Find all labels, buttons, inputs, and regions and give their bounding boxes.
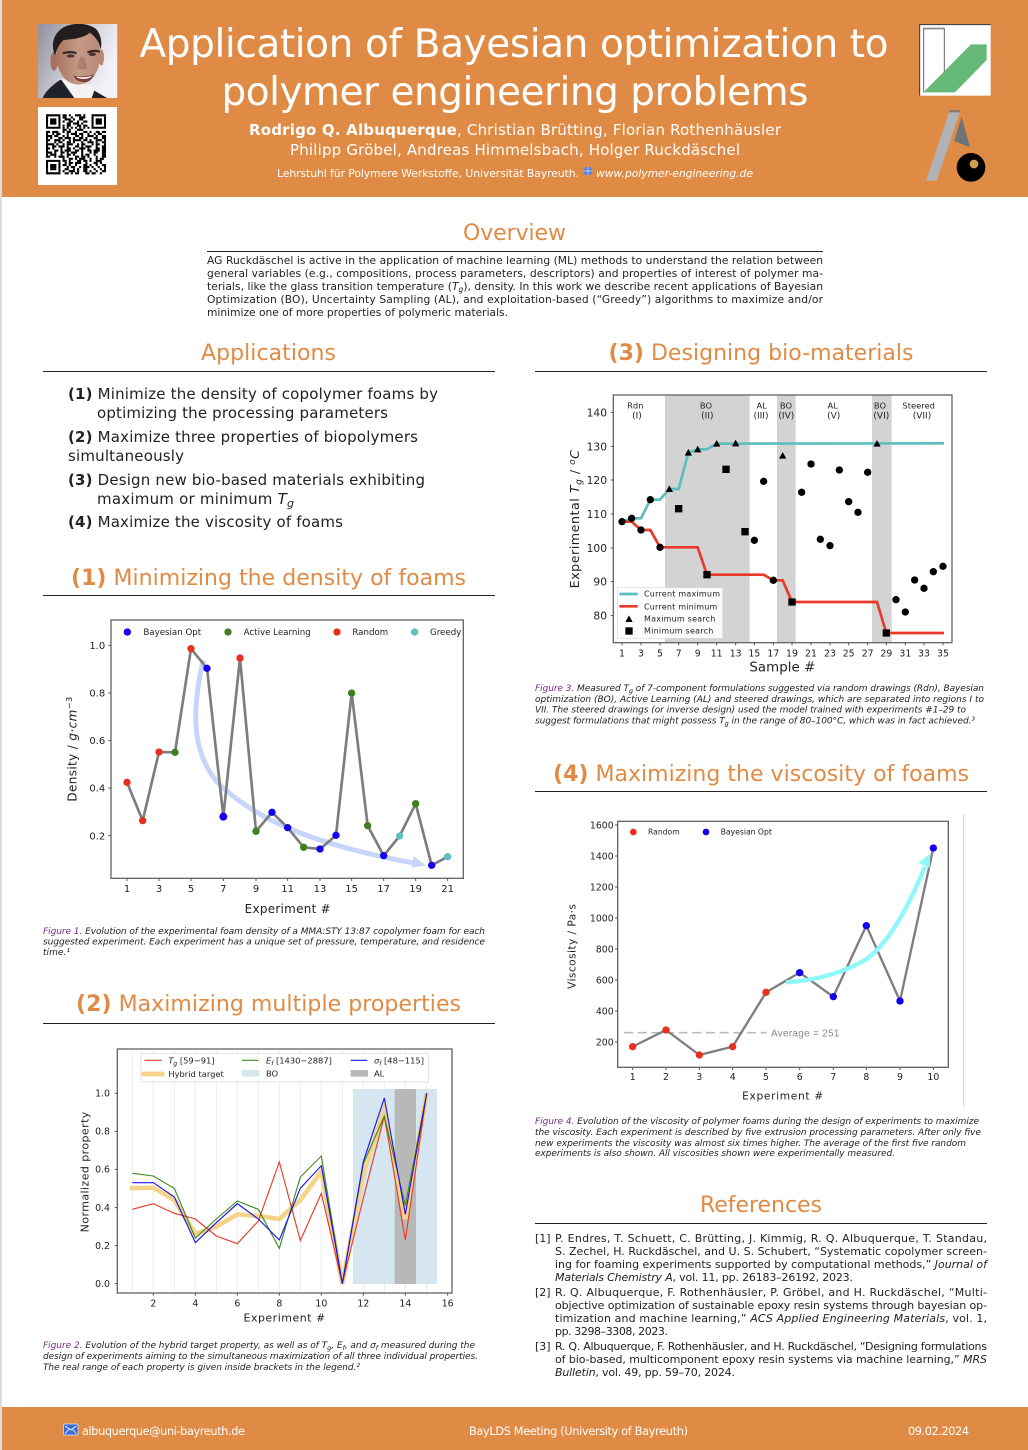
chart: density per experiment <box>64 620 463 916</box>
axes labels: 140 <box>587 406 607 419</box>
axes labels: 3 <box>638 649 644 660</box>
icon: email <box>64 1424 78 1435</box>
axes labels: 100 <box>587 542 607 555</box>
figure 4 caption: Figure 4. Evolution of the viscosity of polymer foams during the design of experiments to maximize <box>535 1117 979 1127</box>
current minimum line <box>622 522 944 633</box>
data points <box>629 844 937 1059</box>
axes labels: 1.0 <box>89 641 105 652</box>
applications list: optimizing the processing parameters <box>97 404 388 422</box>
axes labels: 1200 <box>590 882 614 893</box>
region labels: AL <box>756 401 767 411</box>
axes labels: 9 <box>253 884 259 895</box>
affiliation <box>277 166 753 180</box>
legend: Maximum search <box>644 614 715 623</box>
region labels <box>627 401 935 422</box>
shaded regions <box>665 395 892 643</box>
axes labels: 3 <box>156 884 162 895</box>
axes labels: 0.2 <box>95 1241 110 1252</box>
contact email: albuquerque@uni-bayreuth.de <box>82 1425 245 1438</box>
title: Application of Bayesian optimization to <box>140 22 888 67</box>
axes labels: 16 <box>442 1299 454 1310</box>
axes labels: 25 <box>843 649 855 660</box>
section 1 heading: (1) Minimizing the density of foams <box>71 566 466 591</box>
figure 2 caption: g <box>327 1344 331 1352</box>
legend: Current minimum <box>644 602 718 611</box>
axes labels: 29 <box>880 649 892 660</box>
axes labels: 2 <box>150 1299 156 1310</box>
axes labels: 31 <box>899 649 911 660</box>
axes labels: 0.8 <box>89 689 105 700</box>
axes labels: 800 <box>596 944 614 955</box>
region labels: (V) <box>827 412 840 422</box>
references section <box>535 1193 989 1379</box>
axes labels: 7 <box>220 884 227 895</box>
axes labels: 8 <box>276 1299 282 1310</box>
data line <box>633 848 933 1055</box>
axes labels: Experiment # <box>243 1312 325 1325</box>
axes labels: 1 <box>619 649 625 660</box>
authors: Rodrigo Q. Albuquerque, Christian Brütting, Florian Rothenhäusler <box>249 121 782 139</box>
section 2 heading: (2) Maximizing multiple properties <box>76 992 461 1017</box>
region labels: BO <box>780 401 793 411</box>
axes labels: C <box>567 450 582 459</box>
axes labels <box>567 406 949 676</box>
axes labels: 15 <box>748 649 760 660</box>
reference 3: Bulletin, vol. 49, pp. 59–70, 2024. <box>555 1366 735 1379</box>
axes labels: 5 <box>188 884 194 895</box>
axes labels: 7 <box>676 649 682 660</box>
affiliation: www.polymer-engineering.de <box>596 167 753 180</box>
axes labels: 1 <box>124 884 130 895</box>
current maximum line <box>622 443 944 522</box>
axes labels: 1.0 <box>95 1089 110 1100</box>
region labels: BO <box>874 401 887 411</box>
figure 2 caption: Figure 2. Evolution of the hybrid target property, as well as of T <box>43 1341 327 1351</box>
applications list: (3) Design new bio-based materials exhibiting <box>68 471 425 489</box>
chart: normalized properties <box>79 1049 454 1325</box>
reference 2: [2] <box>535 1286 551 1299</box>
axes labels: g <box>575 479 585 485</box>
axes labels: Density / g·cm <box>66 710 80 802</box>
axes labels: 7 <box>830 1072 836 1083</box>
QR code <box>38 107 117 185</box>
axes labels: 9 <box>695 649 701 660</box>
figure 3 caption: in the range of 80–100°C, which was in fact achieved.³ <box>729 716 975 726</box>
authors <box>249 121 782 159</box>
axes labels: 27 <box>862 649 874 660</box>
axes labels: 1400 <box>590 851 614 862</box>
reference 1 <box>535 1232 989 1284</box>
series: Ef <box>132 1093 427 1284</box>
legend: [48−115] <box>381 1056 424 1066</box>
applications list: (4) Maximize the viscosity of foams <box>68 513 343 531</box>
legend <box>141 1053 428 1082</box>
overview text: minimize one of more properties of polymeric materials. <box>207 306 508 319</box>
event: BayLDS Meeting (University of Bayreuth) <box>469 1425 688 1438</box>
reference 1: [1] <box>535 1232 551 1245</box>
axes labels: 6 <box>797 1072 803 1083</box>
reference 2: R. Q. Albuquerque, F. Rothenhäusler, P. Gröbel, and H. Ruckdäschel, “Multi- <box>555 1286 987 1299</box>
axes labels: 19 <box>786 649 798 660</box>
reference 1: ing for foaming experiments supported by computational methods,” Journal of <box>555 1258 989 1271</box>
applications list: (2) Maximize three properties of biopolymers <box>68 428 418 446</box>
figure 2 caption: , and σ <box>345 1341 376 1351</box>
header banner <box>2 0 1028 197</box>
axes labels: 23 <box>824 649 836 660</box>
figure 3 caption: suggest formulations that might possess T <box>535 716 725 726</box>
figure 3 caption: Figure 3. Measured T <box>535 684 629 694</box>
legend: Random <box>648 828 680 837</box>
region labels: Steered <box>902 401 935 411</box>
figure 3 caption: g <box>629 687 633 695</box>
overview text: general variables (e.g., compositions, process parameters, descriptors) and properties of interest of polymer ma- <box>207 267 823 280</box>
portrait photo <box>38 24 117 98</box>
legend: Current maximum <box>644 590 720 599</box>
applications list: maximum or minimum T <box>97 490 287 508</box>
axes labels: 33 <box>918 649 930 660</box>
axes labels: 11 <box>281 884 294 895</box>
legend <box>124 628 461 638</box>
reference 2: objective optimization of sustainable epoxy resin systems through bayesian op- <box>555 1299 987 1312</box>
applications list: (1) Minimize the density of copolymer foams by <box>68 385 438 403</box>
logo: university emblem <box>926 110 985 182</box>
axes labels: 13 <box>730 649 742 660</box>
legend: E <box>266 1056 272 1066</box>
axes labels: 19 <box>409 884 422 895</box>
legend: Hybrid target <box>168 1069 225 1079</box>
figure 2 caption: f <box>376 1344 380 1352</box>
axes labels: 12 <box>357 1299 369 1310</box>
axes labels: 10 <box>315 1299 327 1310</box>
axes labels: 0.6 <box>95 1165 110 1176</box>
axes labels: 120 <box>587 474 607 487</box>
data points <box>123 645 451 869</box>
axes labels: 17 <box>377 884 390 895</box>
axes labels: 90 <box>593 576 607 589</box>
figure 2 caption: f <box>343 1344 347 1352</box>
overview text: AG Ruckdäschel is active in the application of machine learning (ML) methods to understand the relation between <box>207 254 823 267</box>
reference 3 <box>535 1340 987 1379</box>
figure 3 caption: VII. The steered drawings (or inverse design) used the model trained with experiments #1–29 to <box>535 706 966 716</box>
axes labels: 10 <box>927 1072 939 1083</box>
region labels: (III) <box>754 412 768 422</box>
figure 4 caption <box>535 1117 981 1159</box>
legend: Bayesian Opt <box>143 628 202 638</box>
reference 2: pp. 3298–3308, 2023. <box>555 1325 668 1338</box>
legend: [59−91] <box>177 1056 215 1066</box>
axes labels: 3 <box>696 1072 702 1083</box>
axes labels: 130 <box>587 440 607 453</box>
average line: Average = 251 <box>771 1029 840 1040</box>
arrow: rising viscosity trend <box>786 853 930 982</box>
figure 3 caption: g <box>725 720 729 728</box>
applications list: g <box>287 497 294 510</box>
legend <box>617 588 723 638</box>
figure 4 caption: the viscosity. Each experiment is described by five extrusion processing parameters. After only five <box>535 1128 981 1138</box>
series: hybrid target <box>130 1093 427 1284</box>
applications section <box>43 341 495 531</box>
footer bar <box>2 1407 1028 1450</box>
axes labels: 200 <box>596 1037 614 1048</box>
region labels: Rdn <box>627 401 644 411</box>
axes labels: 5 <box>657 649 663 660</box>
axes labels: 0.4 <box>89 784 105 795</box>
figure 2 caption: , E <box>331 1341 343 1351</box>
axes labels: 35 <box>937 649 949 660</box>
reference 3: R. Q. Albuquerque, F. Rothenhäusler, and H. Ruckdäschel, “Designing formulations <box>555 1340 987 1353</box>
axes labels: 5 <box>763 1072 769 1083</box>
overview text <box>207 254 824 319</box>
reference 2 <box>535 1286 987 1338</box>
legend: f <box>379 1060 382 1067</box>
overview text: g <box>459 285 464 294</box>
legend: Active Learning <box>244 628 311 638</box>
figure 4 caption: new experiments the viscosity was almost six times higher. The average of the first five random <box>535 1139 966 1149</box>
axes labels: / <box>567 465 582 479</box>
axes labels: 0.8 <box>95 1127 110 1138</box>
axes labels: 400 <box>596 1006 614 1017</box>
axes labels: o <box>568 459 578 465</box>
region labels: (VI) <box>873 412 889 422</box>
axes labels: Viscosity / Pa·s <box>566 904 579 989</box>
legend: [1430−2887] <box>273 1056 332 1066</box>
region labels: (II) <box>701 412 713 422</box>
reference 3: of bio-based, multicomponent epoxy resin systems via machine learning,” MRS <box>555 1353 987 1366</box>
axes labels: −3 <box>64 697 74 709</box>
applications heading: Applications <box>201 341 336 366</box>
axes labels: Experiment # <box>742 1089 823 1102</box>
logo: square emblem <box>919 24 991 96</box>
reference 1: S. Zechel, H. Ruckdäschel, and U. S. Schubert, “Systematic copolymer screen- <box>555 1245 987 1258</box>
axes labels: 17 <box>767 649 779 660</box>
legend: Minimum search <box>644 626 713 635</box>
axes labels: 4 <box>192 1299 198 1310</box>
axes labels: 1000 <box>590 913 614 924</box>
data line <box>127 649 448 865</box>
axes labels: 9 <box>897 1072 903 1083</box>
legend: AL <box>374 1068 385 1078</box>
axes labels: 2 <box>663 1072 669 1083</box>
axes labels: 0.2 <box>89 831 105 842</box>
figure 1 caption: suggested experiment. Each experiment has a unique set of pressure, temperature, and residence <box>43 938 485 948</box>
figure 3 caption: of 7-component formulations suggested via random drawings (Rdn), Bayesian <box>633 684 984 694</box>
axes labels: 8 <box>863 1072 869 1083</box>
axes labels <box>64 641 454 916</box>
axes labels: 0.4 <box>95 1203 110 1214</box>
figure 2 caption: The real range of each property is given inside brackets in the legend.² <box>43 1363 360 1373</box>
title <box>140 22 888 115</box>
reference 3: [3] <box>535 1340 551 1353</box>
applications list <box>68 385 438 531</box>
axes labels: 600 <box>596 975 614 986</box>
overview text: terials, like the glass transition temperature (T <box>207 280 458 293</box>
overview heading: Overview <box>463 221 566 246</box>
figure 1 caption: time.¹ <box>43 948 70 958</box>
legend: g <box>173 1060 177 1067</box>
series: Tg <box>132 1093 427 1284</box>
axes labels <box>79 1089 454 1325</box>
section 3 heading: (3) Designing bio-materials <box>608 341 914 366</box>
region labels: (I) <box>632 412 642 422</box>
legend: Greedy <box>430 628 461 638</box>
axes labels: 21 <box>805 649 817 660</box>
axes labels: 0.6 <box>89 736 105 747</box>
figure 2 caption <box>43 1341 478 1373</box>
figure 2 caption: measured during the <box>378 1341 475 1351</box>
reference 1: P. Endres, T. Schuett, C. Brütting, J. Kimmig, R. Q. Albuquerque, T. Standau, <box>555 1232 987 1245</box>
sample markers <box>618 440 947 637</box>
axes labels: 4 <box>730 1072 736 1083</box>
arrow: decreasing density trend <box>196 660 426 868</box>
authors: Philipp Gröbel, Andreas Himmelsbach, Holger Ruckdäschel <box>290 141 740 159</box>
references heading: References <box>700 1193 822 1218</box>
series: sigma f <box>132 1093 427 1284</box>
section 4 heading: (4) Maximizing the viscosity of foams <box>553 762 969 787</box>
legend: T <box>168 1056 174 1066</box>
applications list: simultaneously <box>68 447 184 465</box>
chart: viscosity per experiment <box>566 815 964 1107</box>
region labels: AL <box>827 401 838 411</box>
axes labels: Experimental T <box>567 485 582 588</box>
axes labels: 15 <box>345 884 358 895</box>
axes labels: 14 <box>399 1299 411 1310</box>
axes labels: 13 <box>314 884 326 895</box>
axes labels: 0.0 <box>95 1279 110 1290</box>
figure 3 caption <box>535 684 984 728</box>
overview section <box>207 221 824 319</box>
axes labels: 1 <box>630 1072 636 1083</box>
overview text: ), density. In this work we describe recent applications of Bayesian <box>463 280 823 293</box>
grid lines and shaded regions <box>132 1049 437 1293</box>
title: polymer engineering problems <box>222 70 808 115</box>
axes labels: 21 <box>441 884 454 895</box>
legend: f <box>271 1060 274 1067</box>
region labels: (VII) <box>913 412 931 422</box>
legend: Bayesian Opt <box>721 828 772 837</box>
axes labels: 6 <box>234 1299 240 1310</box>
affiliation: Lehrstuhl für Polymere Werkstoffe, Universität Bayreuth. <box>277 167 579 180</box>
axes labels: 1600 <box>590 820 614 831</box>
reference 2: timization and machine learning,” ACS Applied Engineering Materials, vol. 1, <box>555 1312 987 1325</box>
figure 4 caption: experiments is also shown. All viscosities shown were experimentally measured. <box>535 1149 895 1159</box>
date: 09.02.2024 <box>908 1425 969 1438</box>
overview text: Optimization (BO), Uncertainty Sampling (AL), and exploitation-based (“Greedy”) algorithms to maximize and/or <box>207 293 824 306</box>
axes labels: 110 <box>587 508 607 521</box>
chart: experimental Tg per sample <box>567 395 952 676</box>
axes labels: Sample # <box>749 661 815 676</box>
figure 1 caption <box>43 927 485 958</box>
region labels: (IV) <box>778 412 794 422</box>
figure 1 caption: Figure 1. Evolution of the experimental foam density of a MMA:STY 13:87 copolymer foam for each <box>43 927 485 937</box>
axes labels: Experiment # <box>245 902 331 916</box>
axes labels: 11 <box>711 649 723 660</box>
legend <box>630 828 772 837</box>
legend: Random <box>352 628 388 638</box>
axes labels: Normalized property <box>79 1111 92 1232</box>
axes labels: 80 <box>593 610 607 623</box>
axes labels <box>566 820 939 1102</box>
legend: BO <box>266 1068 279 1078</box>
legend: σ <box>374 1056 380 1066</box>
region labels: BO <box>700 401 713 411</box>
figure 2 caption: design of experiments aiming to the simultaneous maximization of all three individual properties. <box>43 1352 478 1362</box>
figure 3 caption: optimization (BO), Active Learning (AL) and steered drawings, which are separated into regions I to <box>535 695 984 705</box>
reference 1: Materials Chemistry A, vol. 11, pp. 26183–26192, 2023. <box>555 1271 853 1284</box>
